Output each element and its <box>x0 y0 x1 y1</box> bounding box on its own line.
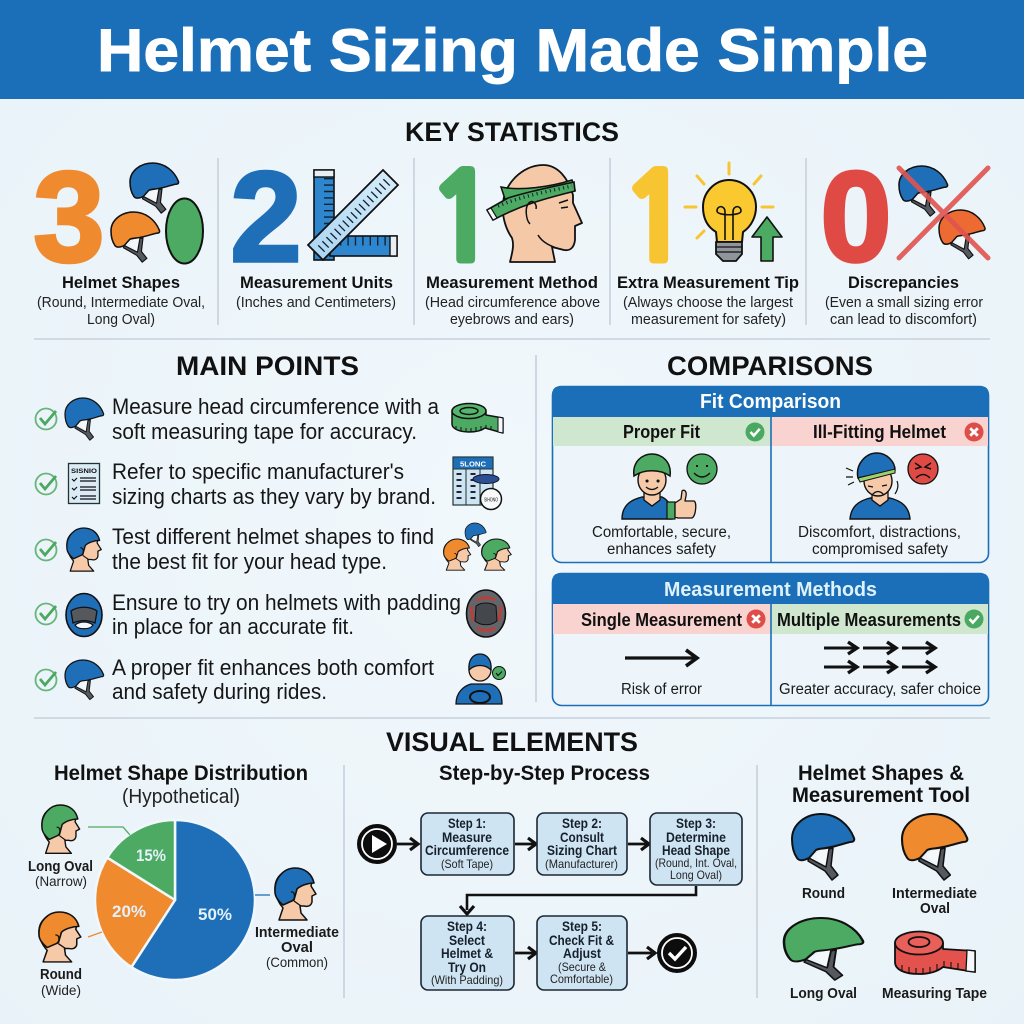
pie panel: helmet shape distribution <box>28 762 339 998</box>
step 5: Comfortable) <box>550 972 613 986</box>
step 1 <box>421 813 514 875</box>
heading <box>54 762 308 808</box>
label: intermediate oval <box>892 885 977 917</box>
text <box>112 655 434 704</box>
icon: check <box>36 474 56 494</box>
text: Measure head circumference with a <box>112 394 440 419</box>
step 1: Circumference <box>425 843 509 858</box>
icon: angry face <box>908 454 938 484</box>
step 3: Step 3: <box>676 816 716 831</box>
main point 3 <box>36 523 511 574</box>
label <box>425 273 600 328</box>
label <box>617 273 799 328</box>
step 3: Long Oval) <box>670 868 722 882</box>
ill-fitting text: Discomfort, distractions, <box>798 524 961 541</box>
ill-fitting header <box>771 417 988 446</box>
icon: brand sizing charts: SIHONO <box>484 498 498 504</box>
single text: Risk of error <box>621 681 702 698</box>
text: the best fit for your head type. <box>112 549 387 574</box>
panel header <box>552 386 989 417</box>
icon: check <box>36 540 56 560</box>
main point 5 <box>36 654 506 704</box>
icon: finish <box>658 934 696 972</box>
main point 1 <box>36 394 503 444</box>
ill-fitting header: Ill-Fitting Helmet <box>813 422 946 442</box>
arrow <box>515 838 536 850</box>
label: Extra Measurement Tip <box>617 273 799 292</box>
multiple text: Greater accuracy, safer choice <box>779 681 981 698</box>
icon: checklist: SISNIO <box>71 468 97 475</box>
label: Helmet Shapes <box>62 273 180 292</box>
step 5: Adjust <box>563 946 601 961</box>
heading: (Hypothetical) <box>122 786 240 808</box>
icon: green tape <box>452 404 503 433</box>
icon: rulers <box>308 170 398 260</box>
round label: (Wide) <box>41 982 81 998</box>
panel header: Measurement Methods <box>664 579 877 601</box>
icon: head with tape <box>487 165 582 262</box>
round label <box>40 966 82 998</box>
stat: measurement method <box>425 159 600 328</box>
text <box>112 524 434 574</box>
icon: rider with check <box>456 654 506 704</box>
process panel: step-by-step <box>358 762 742 990</box>
icon: check <box>36 670 56 690</box>
column dividers <box>34 158 990 998</box>
icon: smiley <box>687 454 717 484</box>
icon: measuring tape <box>895 932 975 974</box>
step 4: Try On <box>448 960 486 975</box>
long oval label <box>28 858 93 889</box>
proper fit text: Comfortable, secure, <box>592 524 731 541</box>
intermediate oval label: Oval <box>281 939 313 956</box>
label: intermediate oval: Oval <box>920 900 950 917</box>
label: measurement for safety) <box>631 311 786 328</box>
stat: extra measurement tip <box>617 159 799 328</box>
number 3: 3 <box>33 146 105 289</box>
icon: helmet inside view <box>66 594 102 636</box>
number 0: 0 <box>820 146 892 289</box>
icon: check <box>36 408 56 430</box>
heading <box>792 762 970 807</box>
label: (Always choose the largest <box>623 294 794 311</box>
pie values: 20% <box>112 902 146 921</box>
label: (Round, Intermediate Oval, <box>37 294 205 311</box>
icon: round helmet <box>792 814 854 880</box>
arrow <box>397 838 418 850</box>
pie values: 50% <box>198 905 232 924</box>
icon: check <box>36 604 56 624</box>
stat: helmet shapes <box>33 146 205 328</box>
round label: Round <box>40 966 82 983</box>
step 3 <box>650 813 742 885</box>
section heading: comparisons: COMPARISONS <box>667 351 873 381</box>
heading: Helmet Shape Distribution <box>54 762 308 785</box>
label <box>825 273 983 328</box>
panel header <box>552 573 989 604</box>
intermediate oval label <box>255 924 339 970</box>
panel: helmet shapes and measurement tool <box>784 762 987 1002</box>
label: Measurement Method <box>426 273 598 292</box>
intermediate oval head <box>275 868 316 920</box>
section heading: main points: MAIN POINTS <box>176 351 359 381</box>
section heading: key statistics: KEY STATISTICS <box>405 117 619 147</box>
label: Discrepancies <box>848 273 959 292</box>
heading: Helmet Shapes & <box>798 762 964 785</box>
label: (Inches and Centimeters) <box>236 294 396 311</box>
title: Helmet Sizing Made Simple <box>97 17 928 84</box>
number 2: 2 <box>230 146 302 289</box>
label: can lead to discomfort) <box>830 311 977 328</box>
connector arrow <box>460 886 696 914</box>
intermediate oval label: (Common) <box>266 954 328 970</box>
round head <box>39 912 81 962</box>
arrows: multiple <box>824 642 935 673</box>
text: and safety during rides. <box>112 679 327 704</box>
stat: discrepancies <box>820 146 988 328</box>
icon: padded helmet <box>466 590 506 637</box>
icon: brand sizing charts: 5LONC <box>460 460 487 468</box>
leader lines <box>88 827 270 937</box>
label: intermediate oval: Intermediate <box>892 885 977 902</box>
stat: measurement units <box>230 146 398 311</box>
label: Measurement Units <box>240 273 393 292</box>
text: Ensure to try on helmets with padding <box>112 590 461 615</box>
step 4: (With Padding) <box>431 973 503 987</box>
main point 2 <box>36 457 502 510</box>
text <box>112 394 440 444</box>
arrow <box>628 947 655 959</box>
section heading: visual elements: VISUAL ELEMENTS <box>386 727 638 757</box>
proper fit text: enhances safety <box>607 541 716 558</box>
arrow <box>628 838 649 850</box>
step 1: (Soft Tape) <box>441 857 493 871</box>
main point 4 <box>36 590 506 639</box>
icon: long oval helmet <box>784 918 863 980</box>
multiple measurements header: Multiple Measurements <box>777 610 961 630</box>
arrow: single <box>625 650 697 666</box>
step 2: (Manufacturer) <box>545 857 618 871</box>
label: (Even a small sizing error <box>825 294 983 311</box>
heading: Measurement Tool <box>792 784 970 807</box>
step 5: Step 5: <box>562 919 602 934</box>
step 2 <box>537 813 627 875</box>
single measurement header: Single Measurement <box>581 610 742 630</box>
step 4: Select <box>449 933 485 948</box>
number 1: 1 <box>427 159 499 278</box>
proper fit header: Proper Fit <box>623 422 700 442</box>
pie values: 15% <box>136 846 166 865</box>
multiple measurements header <box>771 604 988 634</box>
step 2: Step 2: <box>562 816 602 831</box>
step 5 <box>537 916 627 990</box>
label: Long Oval) <box>87 311 155 328</box>
step 3: Determine <box>666 830 726 845</box>
label: round: Round <box>802 885 845 902</box>
text: soft measuring tape for accuracy. <box>112 419 417 444</box>
text: Refer to specific manufacturer's <box>112 459 404 484</box>
ill-fitting text <box>798 524 961 558</box>
icon: light bulb with arrow <box>685 163 782 261</box>
label <box>37 273 205 328</box>
step 1: Step 1: <box>448 816 486 831</box>
step 4: Step 4: <box>447 919 487 934</box>
text <box>112 459 436 509</box>
step 5: Check Fit & <box>549 933 614 948</box>
icon: helmet <box>65 660 104 700</box>
step 3: (Round, Int. Oval, <box>655 856 737 870</box>
proper fit header <box>553 417 771 446</box>
icon: three helmet shapes <box>111 163 203 264</box>
step 3: Head Shape <box>662 843 730 858</box>
icon: helmet on head <box>67 528 101 571</box>
step 1: Measure <box>442 830 492 845</box>
ill-fitting text: compromised safety <box>812 541 948 558</box>
pie chart <box>95 820 255 980</box>
proper fit text <box>592 524 731 558</box>
icon: helmet <box>65 398 104 440</box>
heading: Step-by-Step Process <box>439 762 650 785</box>
long oval label: (Narrow) <box>35 873 87 889</box>
icon: heads with different helmets <box>444 523 511 570</box>
label <box>236 273 396 311</box>
panel: measurement methods <box>552 573 989 706</box>
text: in place for an accurate fit. <box>112 614 354 639</box>
icon: crossed out helmets <box>899 166 988 259</box>
number 1: 1 <box>620 159 692 278</box>
intermediate oval label: Intermediate <box>255 924 339 941</box>
text: A proper fit enhances both comfort <box>112 655 434 680</box>
arrow <box>515 947 536 959</box>
label: eyebrows and ears) <box>450 311 574 328</box>
step 4: Helmet & <box>441 946 493 961</box>
pie values <box>112 846 232 924</box>
step 5: (Secure & <box>558 960 606 974</box>
icon: uncomfortable rider <box>846 453 910 519</box>
label: long oval: Long Oval <box>790 985 857 1002</box>
icon: brand sizing charts <box>453 457 502 510</box>
text: Test different helmet shapes to find <box>112 524 434 549</box>
icon: checklist <box>68 464 100 504</box>
label: measuring tape: Measuring Tape <box>882 985 987 1002</box>
step 4 <box>421 916 514 990</box>
long oval head <box>42 805 80 853</box>
text: sizing charts as they vary by brand. <box>112 484 436 509</box>
panel: fit comparison <box>552 386 989 563</box>
single measurement header <box>553 604 771 634</box>
icon: intermediate oval helmet <box>902 814 967 880</box>
step 2: Sizing Chart <box>547 843 617 858</box>
long oval label: Long Oval <box>28 858 93 875</box>
step 2: Consult <box>560 830 604 845</box>
icon: start <box>358 825 396 863</box>
icon: happy rider <box>622 454 696 519</box>
text <box>112 590 461 639</box>
panel header: Fit Comparison <box>700 391 841 413</box>
header banner <box>0 0 1024 99</box>
label: (Head circumference above <box>425 294 600 311</box>
